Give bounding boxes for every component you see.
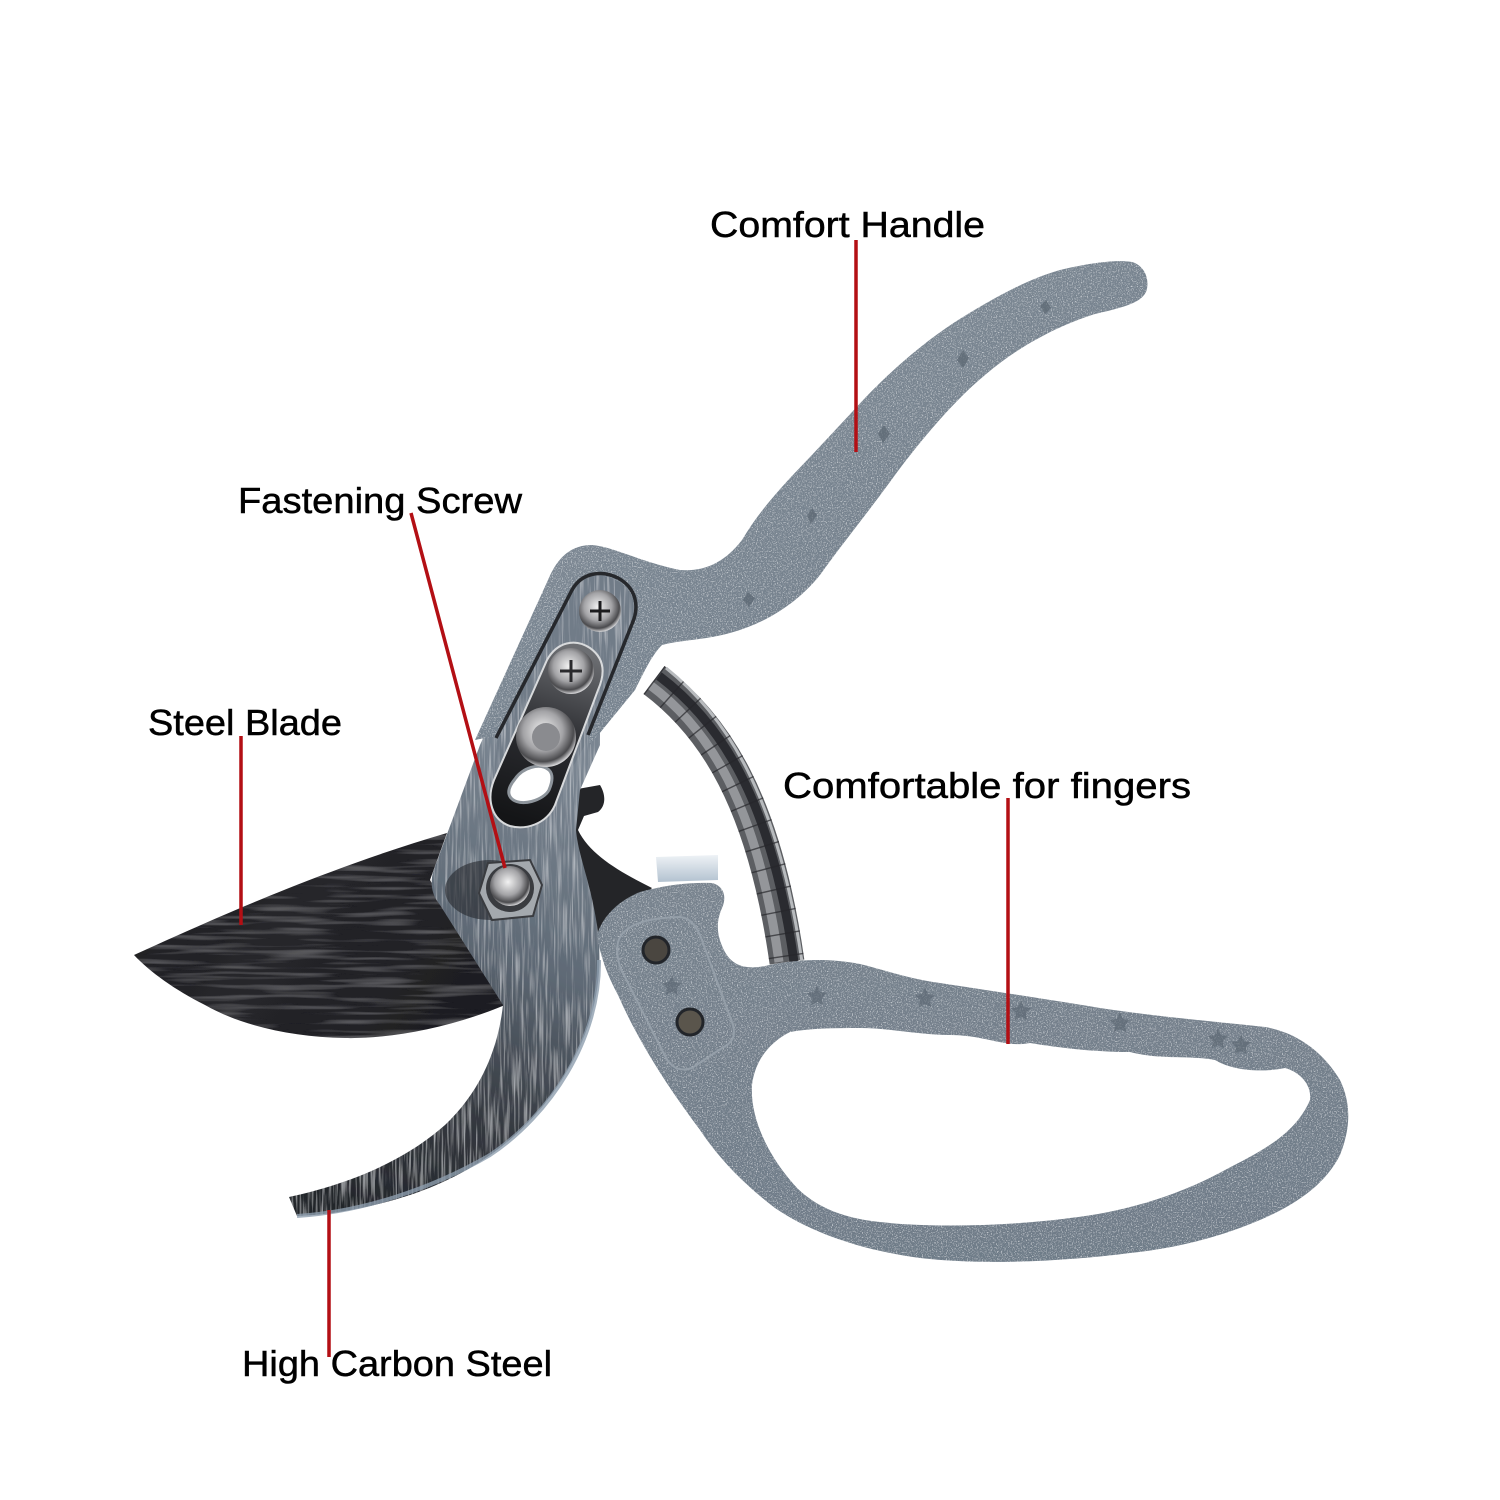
nut dome [486, 864, 534, 912]
leader line [854, 240, 858, 452]
spring coil body [654, 680, 787, 962]
fastening nut [479, 860, 542, 920]
screw head [516, 707, 576, 767]
screw head [579, 590, 621, 632]
spring coils [654, 680, 787, 962]
lower ring handle [597, 883, 1348, 1262]
star row [662, 975, 1251, 1054]
leader line [239, 736, 243, 925]
upper comfort handle [475, 261, 1147, 745]
star marks [662, 975, 1251, 1054]
screw cross [560, 660, 582, 682]
screw head [548, 648, 594, 694]
top rivet [643, 937, 669, 963]
blade hook [570, 785, 652, 940]
middle phillips screw [548, 648, 594, 694]
chrome slot plate [491, 643, 603, 827]
steel blade [134, 833, 505, 1038]
brushed screw plate [495, 576, 634, 790]
label: High Carbon Steel [242, 1343, 552, 1384]
spring highlight [666, 668, 802, 962]
leader line [327, 1210, 331, 1357]
slot hole [509, 766, 552, 803]
bottom rivet [677, 1009, 703, 1035]
leader line [1006, 798, 1010, 1044]
pruning shears illustration [134, 261, 1348, 1262]
label: Comfort Handle [710, 204, 985, 245]
top phillips screw [579, 590, 621, 632]
plastic lock tab [656, 855, 718, 882]
hex nut [479, 860, 542, 920]
screw socket [532, 723, 560, 751]
callout: fastening screw [238, 480, 523, 868]
screw cross [590, 601, 610, 621]
spring light band [650, 685, 779, 962]
curved blade edge highlight [297, 960, 599, 1216]
label: Steel Blade [148, 702, 342, 743]
label: Comfortable for fingers [783, 765, 1191, 806]
spring dark band [659, 676, 794, 962]
plate slot rim [496, 574, 636, 738]
fastening nut shadow [445, 860, 535, 920]
handle bumps [743, 300, 1051, 607]
spring [650, 668, 802, 962]
leader line [411, 513, 505, 868]
brushed lever and curved lower blade [289, 700, 600, 1216]
label: Fastening Screw [238, 480, 523, 521]
handle bump marks [743, 300, 1051, 607]
lower hex screw [516, 707, 576, 767]
rivet panel [617, 917, 734, 1070]
nut highlight [490, 866, 530, 906]
